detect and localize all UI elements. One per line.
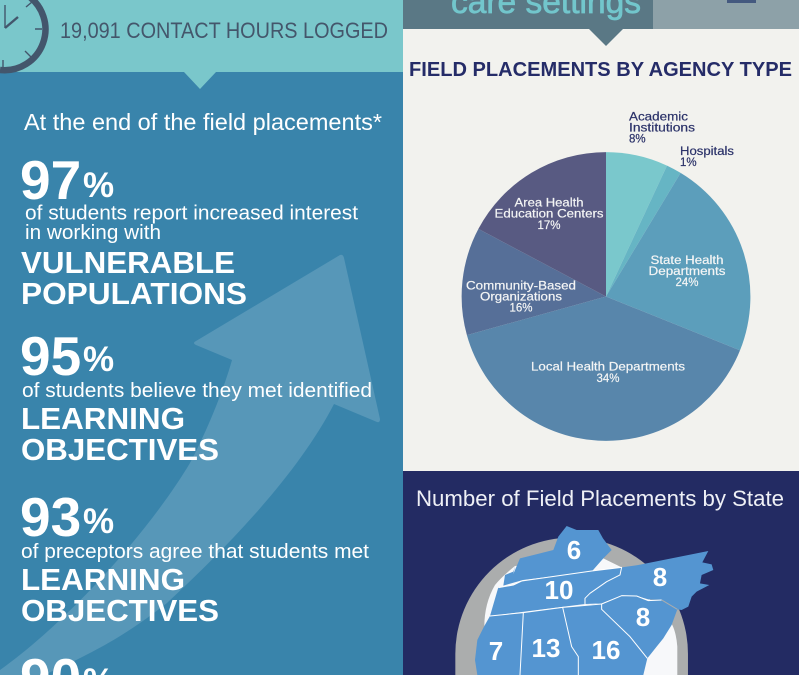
pie chart xyxy=(462,112,750,441)
label: hospitals xyxy=(680,146,734,169)
map: southeastern states xyxy=(455,526,713,675)
label: community-based organizations: 16% xyxy=(509,303,533,315)
stat: 95 percent: 95 xyxy=(20,325,81,387)
label: area health education centers: Education Centers xyxy=(494,209,604,221)
stat: 97 percent: in working with xyxy=(25,222,161,244)
label: hospitals: 1% xyxy=(680,157,697,169)
stat: 95 percent: OBJECTIVES xyxy=(21,432,219,467)
label: hospitals: Hospitals xyxy=(680,146,734,158)
label: academic institutions xyxy=(629,112,695,146)
icon: clock xyxy=(0,0,45,70)
icon: rising arrow xyxy=(0,255,380,675)
panel: student outcomes xyxy=(0,72,403,675)
stat: 97 percent: VULNERABLE xyxy=(21,245,235,280)
stat: 97 percent: 97 xyxy=(20,149,81,211)
value: georgia: 16 xyxy=(592,635,620,665)
label: academic institutions: Institutions xyxy=(629,123,695,135)
stat: 90 percent xyxy=(20,647,114,675)
label: community-based organizations: Organizations xyxy=(480,291,562,303)
stat: 97 percent: POPULATIONS xyxy=(21,276,247,311)
label: local health departments: Local Health Departments xyxy=(531,362,685,374)
stat: 95 percent: LEARNING xyxy=(21,401,185,436)
stat: 93 percent: 93 xyxy=(20,486,81,548)
label: area health education centers xyxy=(494,198,604,232)
text: contact hours logged: 19,091 CONTACT HOURS LOGGED xyxy=(60,18,388,43)
value: north carolina: 8 xyxy=(653,562,667,592)
label: state health departments: 24% xyxy=(675,277,699,289)
banner: contact hours xyxy=(0,0,403,89)
label: state health departments: State Health xyxy=(650,255,724,267)
stat: 93 percent: of preceptors agree that students met xyxy=(21,541,369,563)
panel: agency type xyxy=(403,0,799,471)
value: alabama: 13 xyxy=(532,633,560,663)
stat: 95 percent: % xyxy=(83,340,114,379)
heading: end of placements: At the end of the field placements* xyxy=(24,109,382,135)
value: kentucky: 6 xyxy=(567,535,581,565)
label: community-based organizations xyxy=(466,280,576,315)
stat: 95 percent: of students believe they met identified xyxy=(22,380,372,402)
label: area health education centers: 17% xyxy=(537,220,561,232)
panel: placements by state xyxy=(403,471,799,675)
stat: 97 percent: % xyxy=(83,166,114,205)
label: area health education centers: Area Health xyxy=(514,198,584,210)
label: academic institutions: Academic xyxy=(629,112,688,124)
label: state health departments xyxy=(648,255,726,289)
value: tennessee: 10 xyxy=(545,575,573,605)
heading: number of field placements by state: Number of Field Placements by State xyxy=(416,486,784,511)
label: community-based organizations: Community-Based xyxy=(466,280,576,292)
label: local health departments xyxy=(531,362,685,385)
heading: field placements by agency type: FIELD PLACEMENTS BY AGENCY TYPE xyxy=(409,58,792,81)
stat: 93 percent: % xyxy=(83,502,114,541)
stat: 93 percent: LEARNING xyxy=(21,562,185,597)
stat: 93 percent: OBJECTIVES xyxy=(21,593,219,628)
label: academic institutions: 8% xyxy=(629,134,646,146)
stat: 95 percent xyxy=(20,325,372,467)
stat: 97 percent: of students report increased interest xyxy=(25,202,358,224)
banner: care settings xyxy=(403,0,799,46)
label: local health departments: 34% xyxy=(596,373,620,385)
value: mississippi: 7 xyxy=(489,636,503,666)
stat: 93 percent xyxy=(20,486,369,628)
stat: 97 percent xyxy=(20,149,358,311)
value: south carolina: 8 xyxy=(636,602,650,632)
label: state health departments: Departments xyxy=(648,266,726,278)
